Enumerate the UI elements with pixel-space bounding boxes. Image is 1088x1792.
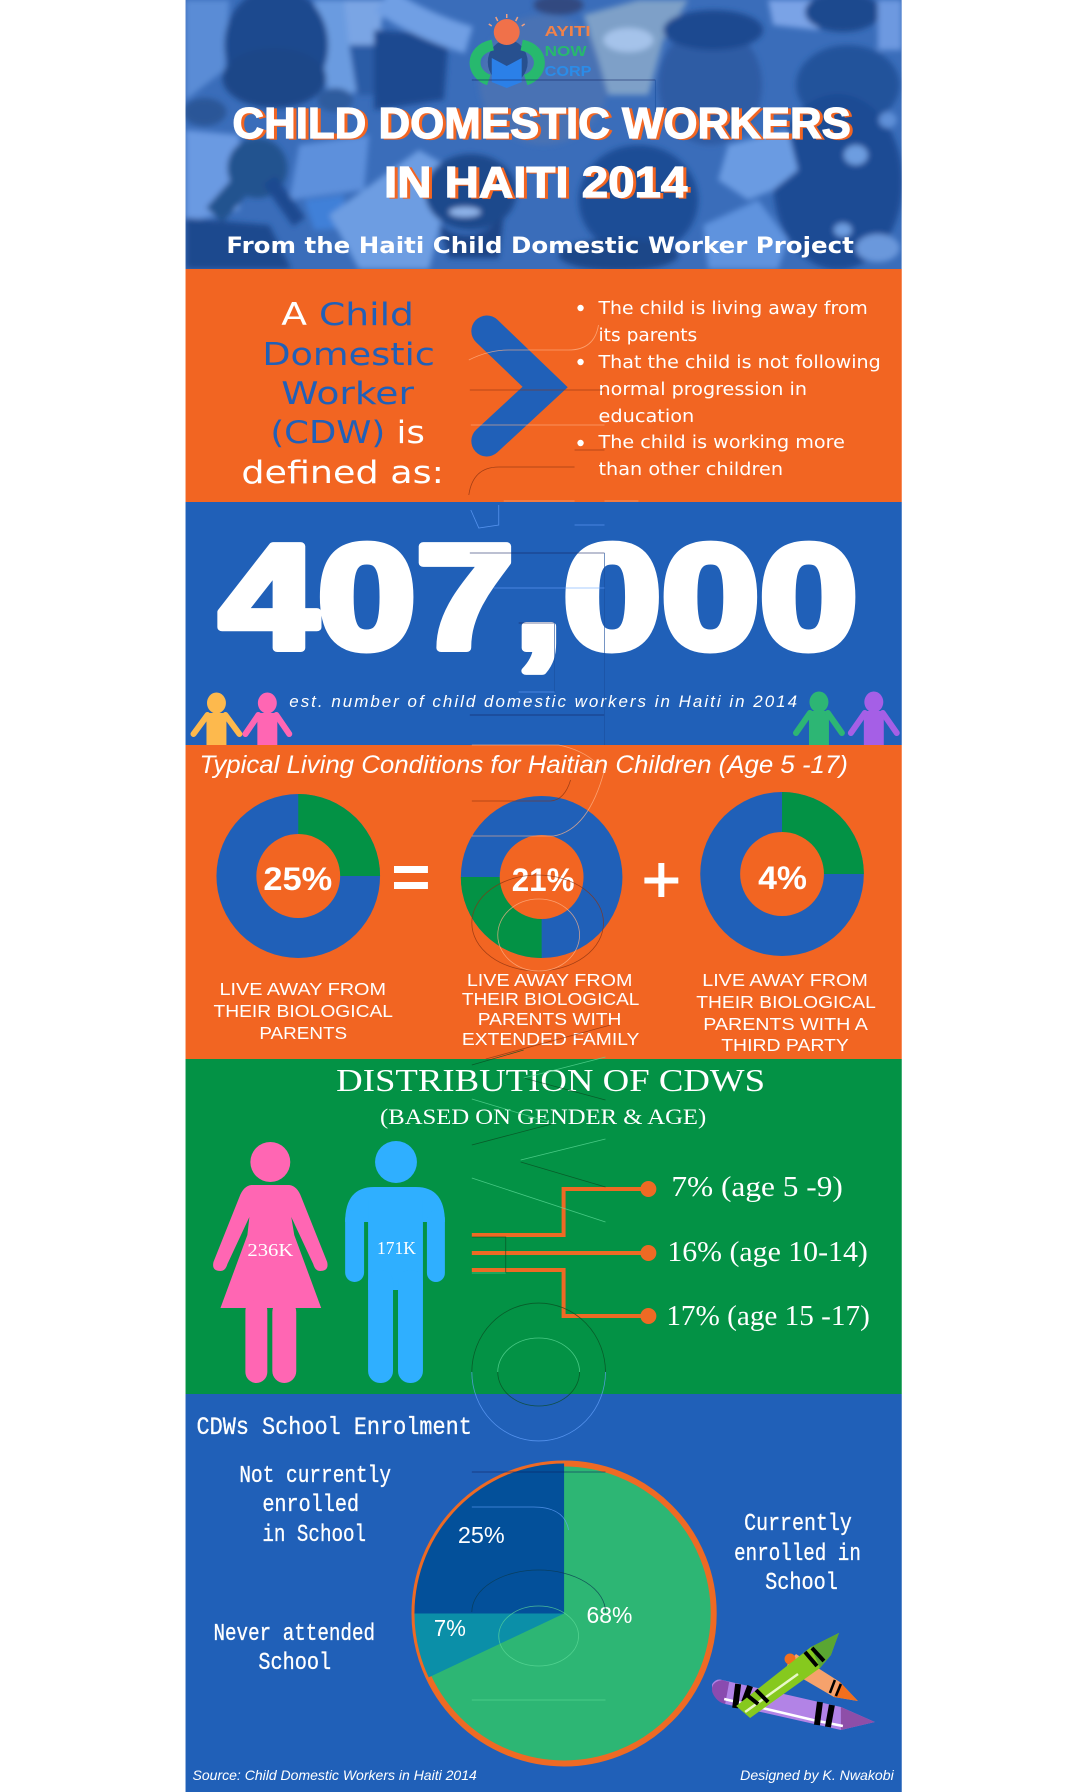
definition heading: Worker [281, 376, 414, 412]
title [232, 99, 851, 207]
definition heading: A Child [281, 297, 414, 333]
pie chart: school enrolment: 25% [458, 1522, 505, 1548]
label: not enrolled: enrolled [262, 1492, 359, 1519]
panel: header photo [183, 0, 903, 271]
label: extended family: LIVE AWAY FROM [467, 970, 632, 990]
pie chart: school enrolment [414, 1464, 714, 1764]
donut chart: 4%: 4% [758, 860, 807, 896]
title: CHILD DOMESTIC WORKERS [232, 99, 851, 148]
age labels: 16% (age 10-14) [667, 1236, 868, 1268]
label: extended family: THEIR BIOLOGICAL [462, 989, 639, 1009]
definition bullet list: The child is working more [597, 432, 845, 453]
definition bullet list [577, 298, 881, 480]
panel: headline number background [186, 502, 902, 745]
panel: distribution background [186, 1059, 902, 1394]
age connector lines [472, 1181, 656, 1324]
definition bullet list: education [599, 406, 694, 427]
definition heading: defined as: [241, 455, 444, 491]
label: extended family: PARENTS WITH [478, 1009, 621, 1029]
label: third party: LIVE AWAY FROM [702, 970, 868, 990]
big number: 407,000 [219, 515, 858, 680]
definition bullet list: normal progression in [599, 379, 807, 400]
panel: living conditions background [186, 745, 902, 1059]
icon: purple child [851, 692, 897, 745]
living conditions heading: Typical Living Conditions for Haitian Children (Age 5 -17) [200, 751, 848, 779]
icon: chevron arrow [487, 331, 545, 441]
label: third party: THEIR BIOLOGICAL [696, 992, 876, 1012]
donut chart: 25% [216, 794, 380, 958]
logo: AYITI [545, 23, 591, 40]
label: currently enrolled: enrolled in [734, 1541, 861, 1568]
icon: crayons [712, 1633, 875, 1730]
icon: female figure [213, 1142, 328, 1383]
label: third party: PARENTS WITH A [703, 1014, 868, 1034]
icon: male figure: 171K [377, 1238, 416, 1258]
distribution heading: DISTRIBUTION OF CDWS [336, 1063, 765, 1098]
label: not enrolled: in School [262, 1522, 366, 1549]
definition bullet list: That the child is not following [597, 352, 881, 373]
age labels: 7% (age 5 -9) [671, 1171, 843, 1203]
panel: definition background [186, 269, 902, 502]
label: extended family [462, 970, 639, 1049]
label: currently enrolled [734, 1511, 861, 1597]
age labels: 17% (age 15 -17) [666, 1300, 870, 1332]
label: never attended: School [258, 1650, 331, 1677]
icon: male figure [345, 1141, 445, 1383]
equals sign [394, 866, 428, 889]
logo: NOW [545, 43, 588, 60]
definition bullet list: than other children [599, 459, 783, 480]
definition heading: Domestic [262, 337, 435, 373]
label: currently enrolled: Currently [744, 1511, 852, 1538]
icon: female figure: 236K [247, 1240, 293, 1260]
label: not enrolled [239, 1463, 391, 1549]
label: never attended: Never attended [213, 1621, 375, 1648]
definition heading [241, 297, 444, 491]
caption: est. number of child domestic workers in Haiti in 2014 [289, 692, 797, 711]
logo [475, 14, 592, 88]
label: not enrolled: Not currently [239, 1463, 391, 1490]
definition bullet list: The child is living away from [597, 298, 868, 319]
label: never attended [213, 1621, 375, 1677]
pie chart: school enrolment: 7% [434, 1615, 466, 1641]
label: third party: THIRD PARTY [721, 1035, 849, 1055]
distribution heading: (BASED ON GENDER & AGE) [380, 1104, 706, 1129]
label: third party [696, 970, 876, 1055]
age labels [666, 1171, 870, 1332]
label: extended family: EXTENDED FAMILY [462, 1029, 639, 1049]
designer credit: Designed by K. Nwakobi [740, 1767, 895, 1783]
definition bullet list: its parents [599, 325, 697, 346]
logo: CORP [545, 63, 592, 80]
label: live away: THEIR BIOLOGICAL [213, 1001, 393, 1021]
donut chart: 4% [700, 792, 864, 956]
pie chart: school enrolment: 68% [587, 1602, 632, 1628]
plus sign [644, 863, 678, 897]
panel: enrolment background [186, 1394, 902, 1792]
definition heading: (CDW) is [270, 415, 425, 451]
icon: green child [796, 692, 842, 745]
label: currently enrolled: School [765, 1570, 838, 1597]
label: live away: LIVE AWAY FROM [219, 979, 386, 999]
label: live away: PARENTS [259, 1023, 347, 1043]
label: live away [213, 979, 393, 1043]
donut chart: 21%: 21% [512, 862, 575, 898]
donut chart: 25%: 25% [263, 861, 332, 897]
subtitle: From the Haiti Child Domestic Worker Project [226, 234, 854, 259]
enrolment heading: CDWs School Enrolment [197, 1414, 472, 1442]
source note: Source: Child Domestic Workers in Haiti 2014 [193, 1767, 477, 1783]
icon: pink child [245, 692, 289, 745]
title: IN HAITI 2014 [384, 158, 688, 207]
donut chart: 21% [461, 796, 622, 958]
icon: yellow child [194, 692, 239, 745]
distribution heading [336, 1063, 765, 1129]
